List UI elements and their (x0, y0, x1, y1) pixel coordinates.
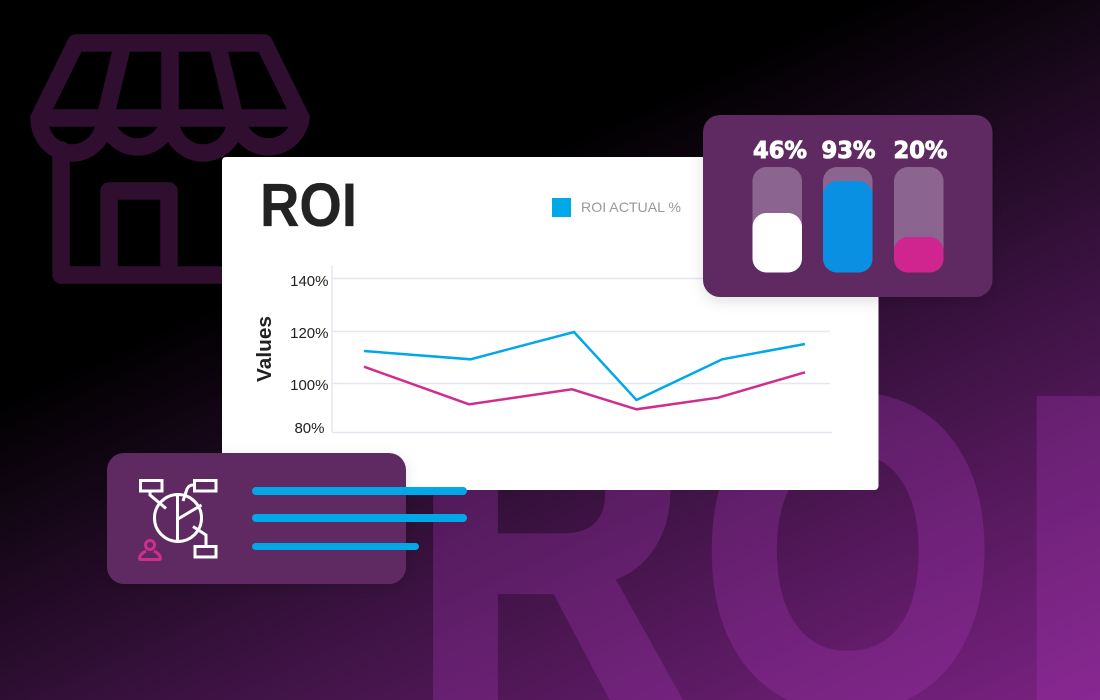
title: ROI (260, 171, 357, 239)
line: ROI actual (364, 332, 805, 400)
y-axis labels: 140% (290, 273, 328, 290)
bar: 93%: 93% (822, 136, 876, 164)
icon: pie chart with linked boxes (140, 480, 216, 557)
legend: ROI ACTUAL % (581, 199, 681, 215)
y-axis labels (290, 273, 328, 437)
y-axis labels: 100% (290, 377, 328, 394)
icon: storefront outline (39, 43, 301, 275)
text placeholder lines (252, 487, 467, 550)
panel: percentage bars (703, 115, 992, 297)
line: ROI target (364, 367, 805, 409)
panel: ROI chart card (222, 157, 878, 490)
bar: 93% (822, 136, 876, 272)
panel: analytics summary (107, 453, 467, 584)
y-axis title: Values (254, 316, 276, 382)
bar: 46%: 46% (753, 136, 807, 164)
y-axis labels: 120% (290, 325, 328, 342)
bar: 20%: 20% (894, 136, 948, 164)
line chart (254, 266, 832, 437)
bar: 20% (894, 136, 948, 272)
bar: 46% (752, 136, 807, 272)
legend (552, 198, 681, 217)
y-axis labels: 80% (294, 420, 324, 437)
icon: person (140, 540, 160, 560)
